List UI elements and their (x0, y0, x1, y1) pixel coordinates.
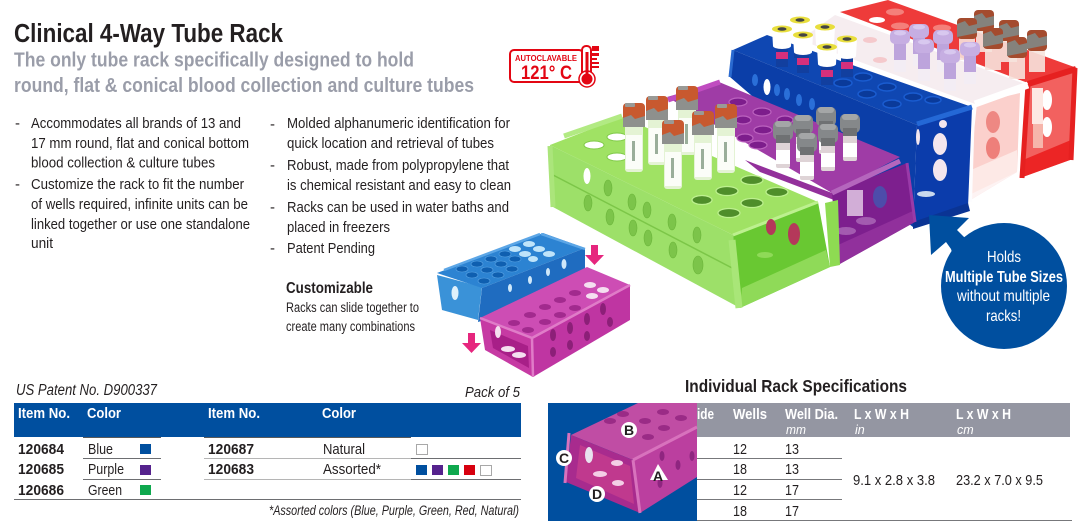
table: item numbers and colors (14, 403, 521, 500)
illustration: orange cap tubes (623, 86, 737, 189)
table: item numbers and colors: Item No. (18, 406, 70, 422)
table: item numbers and colors: Item No. (208, 406, 260, 422)
text block: features left column: Accommodates all brands of 13 and (31, 115, 241, 132)
table: item numbers and colors: Blue (88, 441, 113, 458)
table: rack specifications: Wells (733, 407, 767, 423)
text block: features right column: - (270, 240, 275, 257)
text block: features right column: Racks can be used in water baths and (287, 199, 509, 216)
text block: features right column: - (270, 116, 275, 133)
text block: features left column: of wells required, infinite units can be (31, 196, 248, 213)
table: item numbers and colors: Assorted* (323, 461, 381, 478)
callout: multiple tube sizes (929, 215, 1067, 349)
table: item numbers and colors: Color (322, 406, 356, 422)
arrow: slide down left (462, 333, 481, 353)
illustration: purple rack (667, 82, 915, 265)
label: D (589, 486, 605, 502)
text: assorted footnote: *Assorted colors (Blue, Purple, Green, Red, Natural) (269, 503, 519, 518)
text block: features left column: unit (31, 235, 54, 252)
callout: multiple tube sizes: without multiple (956, 288, 1050, 305)
text block: customizable: Customizable (286, 280, 373, 297)
table: item numbers and colors: 120687 (208, 441, 254, 458)
table: item numbers and colors: Color (87, 406, 121, 422)
text block: features right column: - (270, 199, 275, 216)
label: C: C (559, 450, 569, 466)
text block: features left column (15, 115, 250, 252)
text block: features right column: Patent Pending (287, 240, 375, 257)
table: item numbers and colors: 120684 (18, 441, 65, 458)
text: patent number: US Patent No. D900337 (16, 382, 158, 399)
table: rack specifications: 17 (785, 503, 799, 520)
illustration: brown cap tubes (957, 10, 1047, 79)
text: pack of 5: Pack of 5 (465, 385, 521, 401)
text block: features left column: - (15, 176, 20, 193)
illustration: red rack (840, 0, 1077, 178)
table: item numbers and colors: Green (88, 482, 122, 499)
table: rack specifications: in (855, 423, 865, 437)
table: rack specifications: 17 (785, 482, 799, 499)
text block: customizable (286, 280, 419, 334)
table: rack specifications: 13 (785, 441, 799, 458)
table: rack specifications (697, 403, 1072, 520)
heading: individual rack specifications: Individual Rack Specifications (685, 376, 907, 396)
table: rack specifications: cm (957, 423, 974, 437)
illustration: small blue and pink racks (437, 233, 630, 377)
callout: multiple tube sizes: racks! (986, 308, 1021, 325)
label: A (650, 464, 668, 484)
table: rack specifications: 12 (733, 441, 747, 458)
icon: autoclavable 121 C badge (510, 46, 599, 87)
table: item numbers and colors: 120685 (18, 461, 64, 478)
text block: customizable: Racks can slide together to (286, 300, 419, 315)
table: rack specifications: 9.1 x 2.8 x 3.8 (853, 472, 935, 489)
illustration: blue rack (730, 35, 972, 229)
table: item numbers and colors: Natural (323, 441, 365, 458)
arrow: slide down right (585, 245, 604, 265)
text block: customizable: create many combinations (286, 319, 415, 334)
illustration: lavender cap tubes (890, 24, 980, 91)
icon: autoclavable 121 C badge: AUTOCLAVABLE (515, 53, 577, 63)
table: item numbers and colors: Purple (88, 461, 124, 478)
title: Clinical 4-Way Tube Rack (14, 20, 284, 48)
label: D: D (592, 486, 602, 502)
label: A: A (653, 468, 663, 484)
text block: features left column: Customize the rack to fit the number (31, 176, 244, 193)
table: rack specifications: L x W x H (956, 407, 1011, 423)
text block: features right column: Robust, made from polypropylene that (287, 157, 510, 174)
subtitle: The only tube rack specifically designed to hold (14, 50, 414, 72)
table: rack specifications: ide (697, 407, 714, 423)
text block: features right column: - (270, 157, 275, 174)
table: rack specifications: mm (786, 423, 806, 437)
icon: autoclavable 121 C badge: 121° C (521, 63, 572, 84)
illustration: green rack (550, 116, 840, 308)
table: rack specifications: 18 (733, 503, 747, 520)
subtitle (14, 50, 474, 97)
text block: features right column: Molded alphanumeric identification for (287, 115, 510, 132)
text block: features right column (270, 115, 511, 257)
table: rack specifications: 13 (785, 461, 799, 478)
text block: features left column: linked together or use one standalone (31, 216, 250, 233)
text block: features right column: quick location and retrieval of tubes (287, 135, 494, 152)
text block: features left column: 17 mm round, flat and conical bottom (31, 135, 249, 152)
text block: features right column: placed in freezers (287, 219, 390, 236)
illustration: white cap tubes (772, 16, 857, 85)
subtitle: round, flat & conical blood collection and culture tubes (14, 75, 474, 97)
table: rack specifications: 12 (733, 482, 747, 499)
text block: features left column: blood collection & culture tubes (31, 154, 215, 172)
callout: multiple tube sizes: Holds (987, 249, 1021, 266)
illustration: labelled rack inset (548, 403, 697, 521)
illustration: grey cap tubes (773, 107, 860, 180)
table: item numbers and colors: 120686 (18, 482, 64, 499)
label: B (621, 422, 637, 438)
text block: features left column: - (15, 115, 20, 132)
table: rack specifications: L x W x H (854, 407, 909, 423)
text block: features right column: is chemical resistant and easy to clean (287, 177, 511, 194)
label: C (556, 450, 572, 466)
table: rack specifications: Well Dia. (785, 407, 838, 423)
table: rack specifications: 18 (733, 461, 747, 478)
table: rack specifications: 23.2 x 7.0 x 9.5 (956, 472, 1043, 489)
label: B: B (624, 422, 634, 438)
illustration: white rack (800, 15, 1028, 202)
table: item numbers and colors: 120683 (208, 461, 254, 478)
